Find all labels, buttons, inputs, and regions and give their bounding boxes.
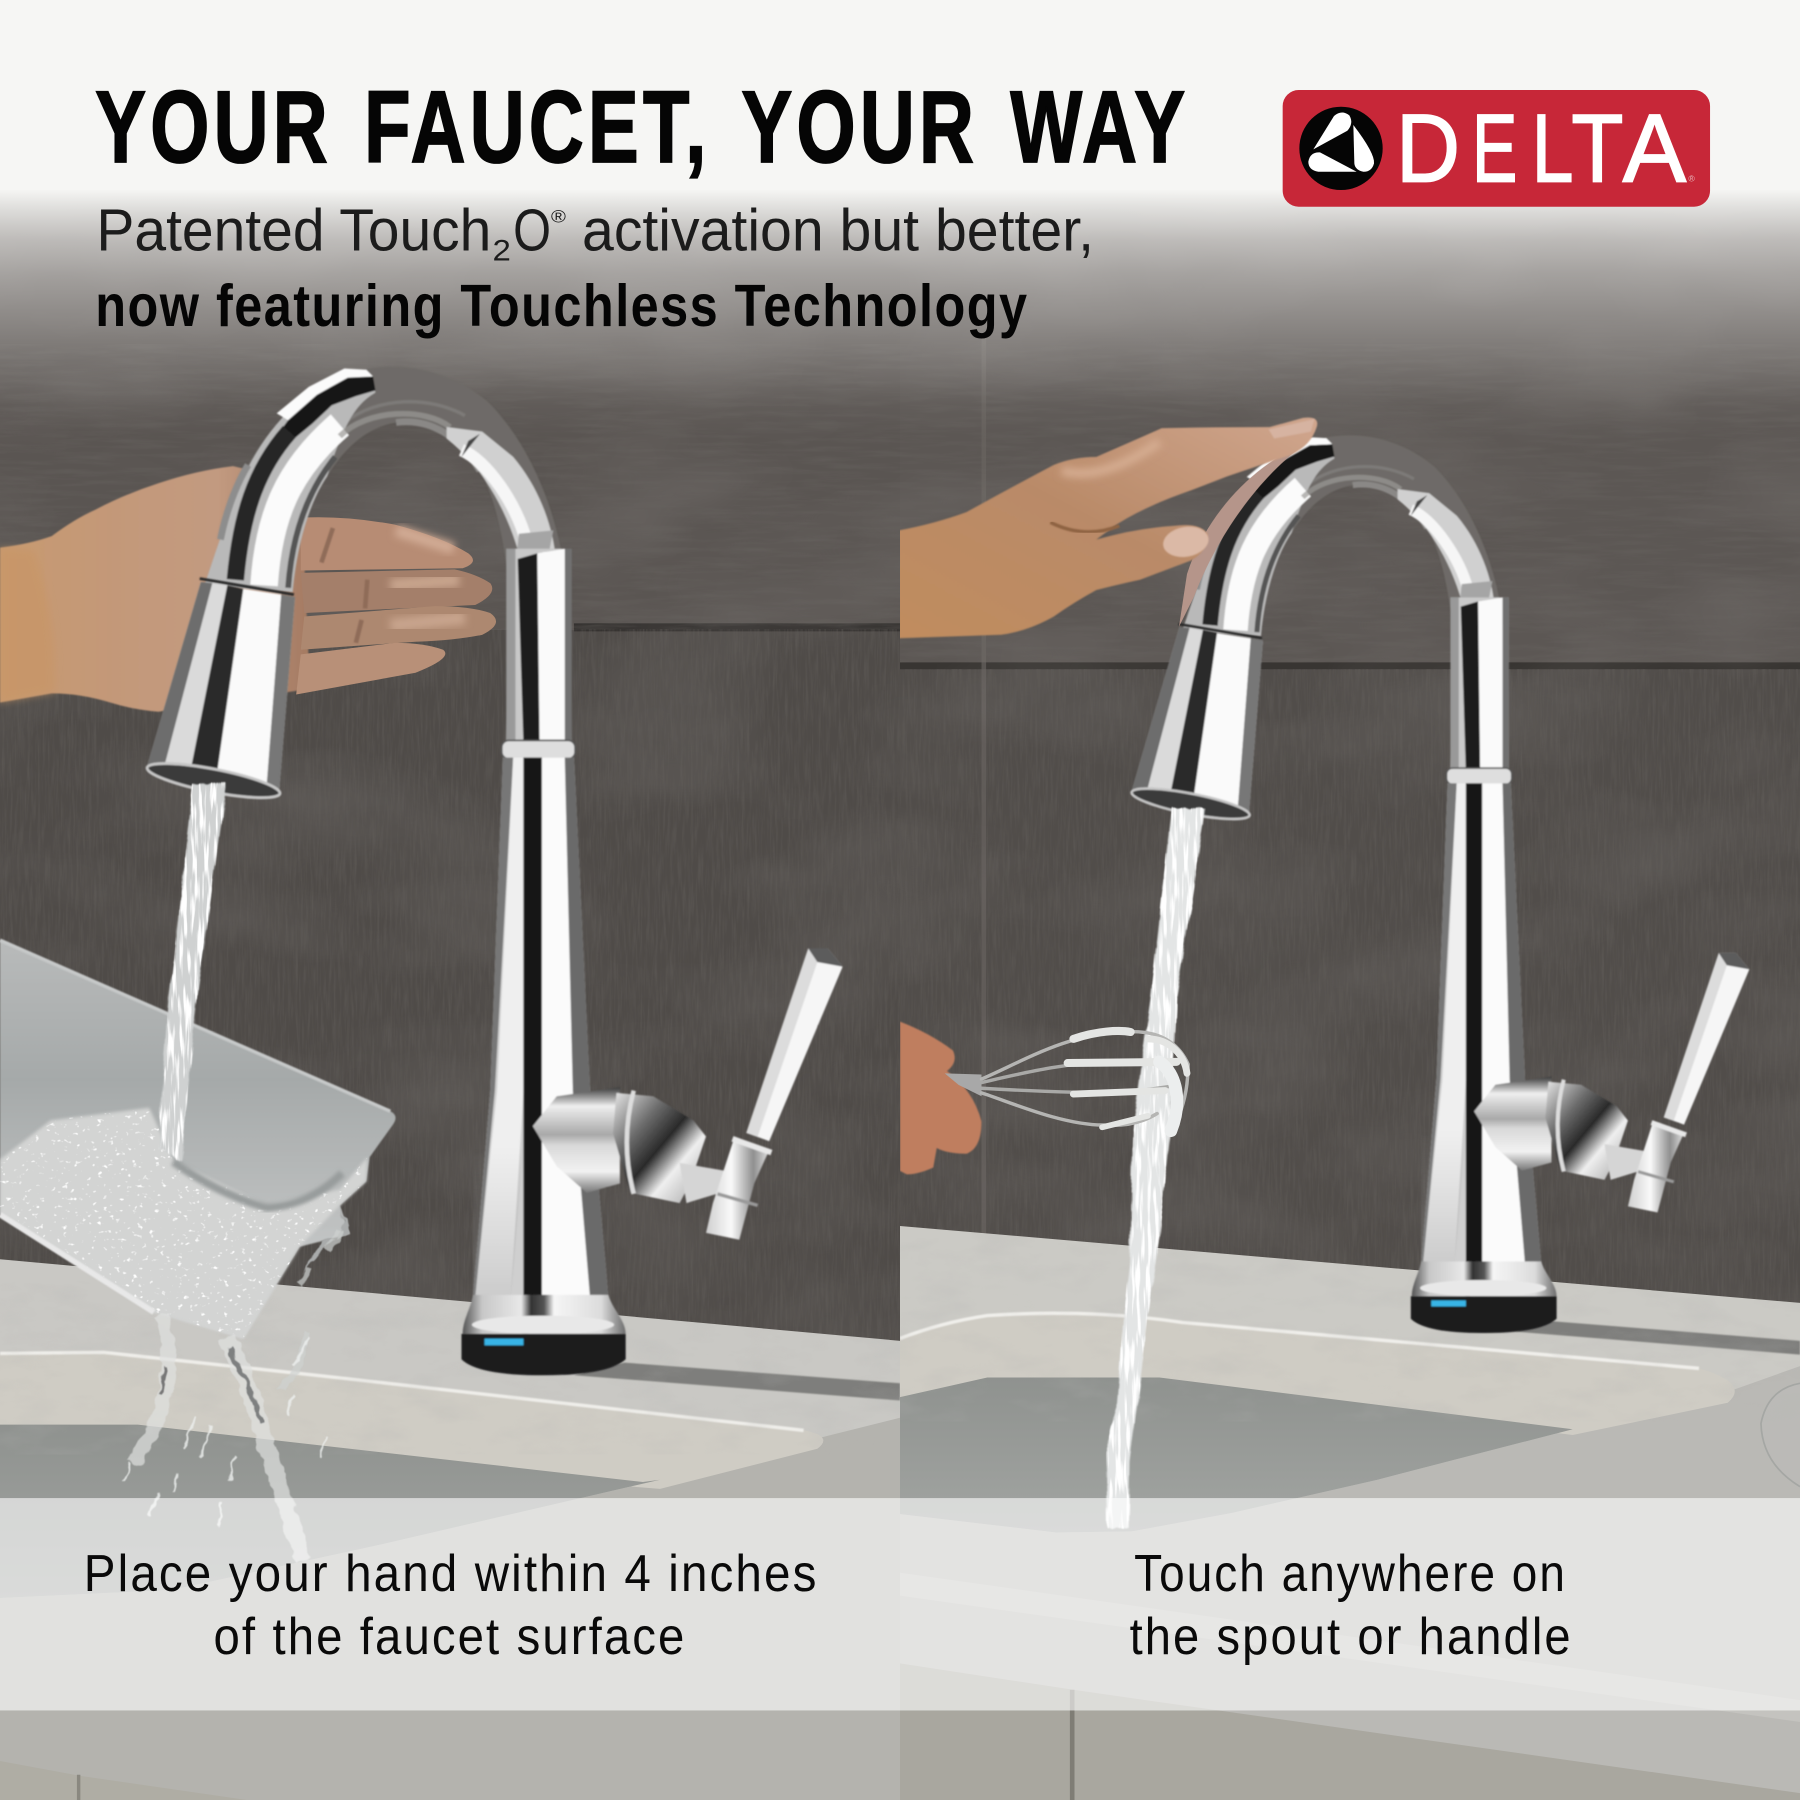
- caption: left: of the faucet surface: [214, 1607, 686, 1665]
- water stream: left: [160, 783, 226, 1162]
- plastic container: [0, 940, 396, 1339]
- logo mark: [1299, 107, 1383, 190]
- falling water splash: [124, 1228, 342, 1561]
- logo: Delta: [1283, 90, 1710, 207]
- spray head: left: [145, 579, 295, 805]
- logo wordmark: L: [1532, 95, 1573, 203]
- subtitle: line one: O: [513, 196, 551, 263]
- logo wordmark: A: [1623, 95, 1687, 203]
- right scene: faucet, hand, whisk and water: [899, 417, 1749, 1528]
- whisk: [945, 1031, 1188, 1131]
- wall: left panel: [0, 196, 900, 1341]
- faucet: left: [204, 367, 843, 1375]
- top fade to white: [0, 0, 1800, 436]
- caption: left: Place your hand within 4 inches: [84, 1544, 818, 1602]
- faucet: right: [1182, 435, 1749, 1333]
- countertop and sink: right panel: [900, 1226, 1800, 1800]
- title: YOUR FAUCET, YOUR WAY: [95, 70, 1189, 184]
- logo wordmark: T: [1571, 95, 1623, 203]
- subtitle: line two: now featuring Touchless Technology: [95, 272, 1029, 339]
- left scene: hand, faucet and water: [0, 367, 843, 1561]
- logo wordmark: D: [1396, 95, 1460, 203]
- wall: right panel: [900, 196, 1800, 1303]
- caption band: left: [0, 1498, 900, 1710]
- water stream: right: [1107, 808, 1205, 1528]
- logo wordmark: E: [1472, 95, 1517, 203]
- caption band: right: [900, 1498, 1800, 1710]
- caption: right: the spout or handle: [1130, 1607, 1573, 1665]
- countertop and sink: left panel: [0, 1259, 900, 1800]
- subtitle: line one: Patented Touch: [96, 196, 491, 263]
- caption: right: Touch anywhere on: [1134, 1544, 1567, 1602]
- subtitle: line one: ®: [551, 207, 566, 227]
- hand: right, touching spout: [899, 417, 1317, 638]
- hand: left, behind spout: [0, 466, 496, 712]
- subtitle: line one: 2: [492, 235, 511, 268]
- hand holding whisk: [900, 1022, 982, 1174]
- spray head: right: [1130, 624, 1263, 825]
- registered mark: ®: [1688, 174, 1695, 184]
- subtitle: line one: activation but better,: [582, 196, 1094, 263]
